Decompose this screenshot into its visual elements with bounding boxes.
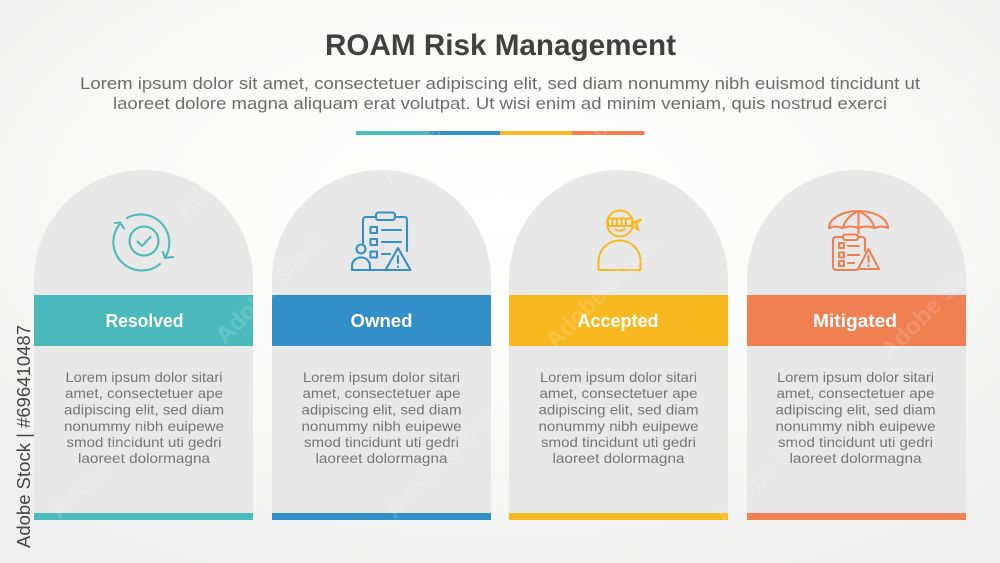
- watermark: repeated diagonal stock marks: Adobe Stock: [875, 241, 998, 364]
- body text: mitigated: amet, consectetuer ape: [776, 385, 935, 401]
- body text: owned: smod tincidunt uti gedri: [304, 434, 459, 450]
- band: mitigated: [747, 295, 966, 346]
- watermark: stock id: Adobe Stock | #696410487: [14, 325, 34, 548]
- body text: owned: adipiscing elit, sed diam: [302, 402, 462, 418]
- bottom bar: accepted: [509, 513, 728, 520]
- body text: accepted: amet, consectetuer ape: [540, 385, 698, 401]
- panel: owned: [272, 170, 491, 520]
- body text: mitigated: laoreet dolormagna: [790, 450, 922, 466]
- watermark: repeated diagonal stock marks: Adobe Stock: [705, 71, 828, 194]
- watermark: repeated diagonal stock marks: Adobe Stock: [40, 61, 163, 184]
- body text: owned: [302, 369, 462, 466]
- body text: accepted: nonummy nibh euipewe: [538, 418, 699, 434]
- watermark: repeated diagonal stock marks: [40, 61, 998, 529]
- watermark: repeated diagonal stock marks: Adobe Stock: [540, 231, 663, 354]
- body text: resolved: smod tincidunt uti gedri: [66, 434, 222, 450]
- label: accepted: Accepted: [578, 311, 658, 331]
- label: owned: Owned: [350, 311, 412, 331]
- body text: owned: laoreet dolormagna: [316, 450, 448, 466]
- body text: owned: nonummy nibh euipewe: [302, 418, 462, 434]
- body text: resolved: amet, consectetuer ape: [65, 385, 223, 401]
- title: ROAM Risk Management: [325, 29, 676, 62]
- body text: mitigated: Lorem ipsum dolor sitari: [777, 369, 934, 385]
- subtitle text: [80, 74, 920, 113]
- watermark: repeated diagonal stock marks: Adobe Stock: [45, 401, 168, 524]
- label: mitigated: Mitigated: [813, 311, 897, 331]
- icon: umbrella over checklist: [829, 211, 888, 270]
- body text: resolved: nonummy nibh euipewe: [64, 418, 224, 434]
- body text: resolved: Lorem ipsum dolor sitari: [66, 369, 222, 385]
- body text: resolved: [64, 369, 224, 466]
- band: owned: [272, 295, 491, 346]
- divider: four colour bar: [356, 131, 644, 135]
- watermark: repeated diagonal stock marks: Adobe Stock: [500, 106, 623, 229]
- panel: mitigated: [747, 170, 966, 520]
- icon: resolved cycle check: [113, 214, 173, 271]
- bottom bar: resolved: [34, 513, 253, 520]
- icon: checklist with person and warning: [352, 212, 410, 270]
- body text: resolved: laoreet dolormagna: [78, 450, 210, 466]
- watermark: repeated diagonal stock marks: Adobe Stock: [170, 101, 293, 224]
- panel: accepted: [509, 170, 728, 520]
- panel: resolved: [34, 170, 253, 520]
- body text: accepted: smod tincidunt uti gedri: [541, 434, 696, 450]
- watermark: repeated diagonal stock marks: Adobe Stock: [375, 66, 498, 189]
- body text: resolved: adipiscing elit, sed diam: [64, 402, 224, 418]
- bottom bar: owned: [272, 513, 491, 520]
- body text: owned: amet, consectetuer ape: [302, 385, 461, 401]
- label: resolved: Resolved: [106, 311, 184, 331]
- watermark: repeated diagonal stock marks: Adobe Stock: [380, 401, 503, 524]
- body text: accepted: adipiscing elit, sed diam: [538, 402, 698, 418]
- band: resolved: [34, 295, 253, 346]
- body text: mitigated: adipiscing elit, sed diam: [776, 402, 936, 418]
- bottom bar: mitigated: [747, 513, 966, 520]
- band: accepted: [509, 295, 728, 346]
- body text: accepted: laoreet dolormagna: [552, 450, 685, 466]
- icon: masked person: [598, 210, 641, 270]
- watermark: repeated diagonal stock marks: Adobe Stock: [710, 406, 833, 529]
- subtitle text: laoreet dolore magna aliquam erat volutpat. Ut wisi enim ad minim veniam, quis nostrud exerci: [113, 94, 887, 113]
- watermark: repeated diagonal stock marks: Adobe Stock: [210, 226, 333, 349]
- body text: mitigated: [776, 369, 936, 466]
- body text: owned: Lorem ipsum dolor sitari: [303, 369, 460, 385]
- body text: mitigated: smod tincidunt uti gedri: [778, 434, 933, 450]
- body text: mitigated: nonummy nibh euipewe: [776, 418, 936, 434]
- body text: accepted: Lorem ipsum dolor sitari: [540, 369, 697, 385]
- body text: accepted: [538, 369, 699, 466]
- watermark: repeated diagonal stock marks: Adobe Stock: [870, 61, 993, 184]
- subtitle text: Lorem ipsum dolor sit amet, consectetuer adipiscing elit, sed diam nonummy nibh euismod tincidunt ut: [80, 74, 920, 93]
